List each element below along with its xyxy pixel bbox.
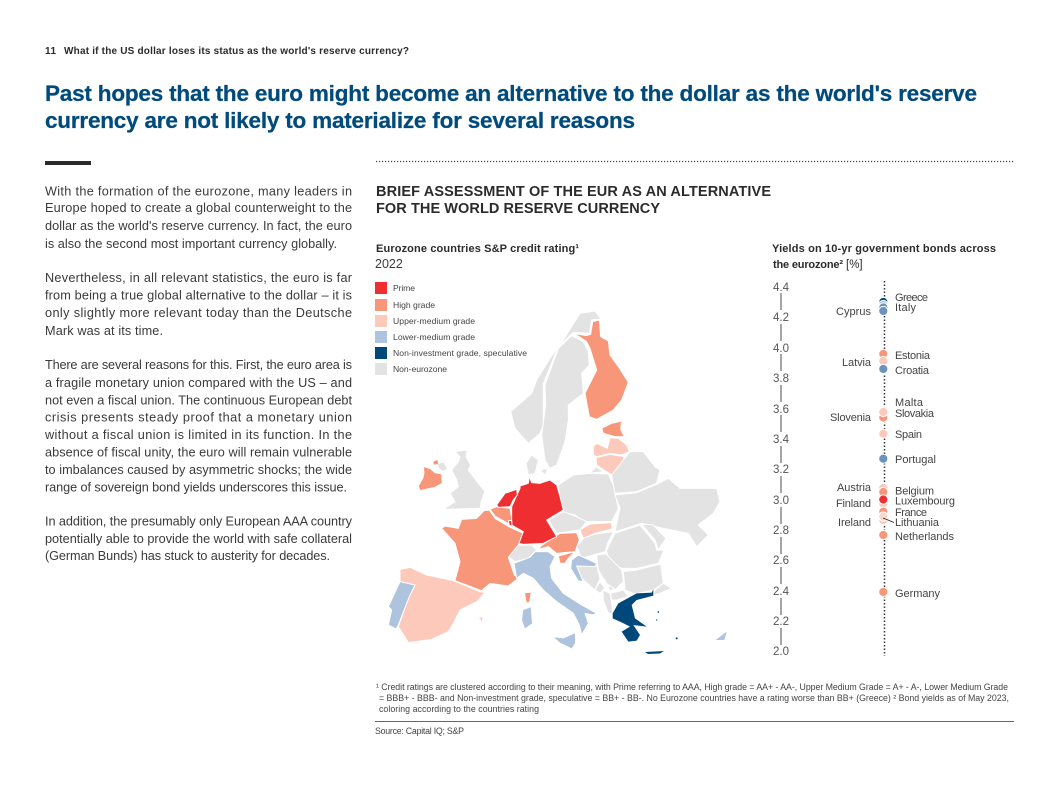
yield country labels right: Luxembourg xyxy=(895,496,955,508)
map of Europe xyxy=(388,311,727,654)
left accent rule xyxy=(45,161,91,165)
footnote rule xyxy=(375,720,1014,722)
body text: Nevertheless, in all relevant statistics, the euro is far xyxy=(45,271,353,285)
body text: only slightly more relevant today than the Deutsche xyxy=(45,306,352,320)
body text: Mark was at its time. xyxy=(45,324,163,338)
yield country labels right: Malta xyxy=(895,397,924,409)
map legend: Lower-medium grade xyxy=(393,332,475,342)
map legend xyxy=(375,282,527,375)
body text: without a fiscal union is limited in its function. In the xyxy=(44,428,352,442)
body text: (German Bunds) has stuck to austerity for decades. xyxy=(45,549,330,563)
yield country labels right xyxy=(895,292,955,600)
eastern Europe xyxy=(540,452,727,648)
dotted yield line xyxy=(884,281,886,656)
yield country labels left: Slovenia xyxy=(830,412,872,424)
body text: potentially able to provide the world with safe collateral xyxy=(45,532,352,546)
yield axis: 2.6 xyxy=(773,555,789,567)
yield country labels right: Lithuania xyxy=(895,517,940,529)
yield country labels left: Finland xyxy=(836,498,871,510)
yield chart heading: Yields on 10-yr government bonds across xyxy=(772,243,996,255)
body text: not even a fiscal union. The continuous European debt xyxy=(45,394,352,408)
yield country labels right: Estonia xyxy=(895,350,931,362)
body text: is also the second most important currency globally. xyxy=(45,237,337,251)
yield axis: 2.0 xyxy=(773,646,789,658)
page header: 11 xyxy=(45,46,56,57)
yield country labels right: Slovakia xyxy=(895,408,935,420)
map heading xyxy=(375,243,579,271)
yield axis: 3.6 xyxy=(773,404,789,416)
map legend: Non-eurozone xyxy=(393,364,447,374)
title xyxy=(45,81,977,133)
title: Past hopes that the euro might become an alternative to the dollar as the world's reserve xyxy=(45,81,977,106)
yield axis: 3.8 xyxy=(773,373,789,385)
yield country labels right: Spain xyxy=(895,429,922,441)
footnote: = BBB+ - BBB- and Non-investment grade, speculative = BB+ - BB-. No Eurozone countries have a rating worse than BB+ (Greece) ² Bond yields as of May 2023, xyxy=(379,693,1009,703)
yield country labels left: Austria xyxy=(837,482,872,494)
footnote: ¹ Credit ratings are clustered according to their meaning, with Prime referring to AAA, High grade = AA+ - AA-, Upper Medium Grade = A+ - A-, Lower Medium Grade xyxy=(376,682,1008,692)
body text: from being a true global alternative to the dollar – it is xyxy=(45,288,352,302)
Lithuania leader line xyxy=(883,518,894,522)
yield axis: 4.0 xyxy=(773,343,789,355)
yield country labels right: Croatia xyxy=(895,365,930,377)
body text xyxy=(44,184,353,563)
yield country labels left xyxy=(830,306,872,529)
body text: There are several reasons for this. First, the euro area is xyxy=(45,358,352,372)
yield dots xyxy=(879,297,888,597)
yield axis: 4.4 xyxy=(773,282,790,294)
yield axis: 3.0 xyxy=(773,495,789,507)
yield country labels right: Belgium xyxy=(895,486,934,498)
northern Europe xyxy=(511,311,629,476)
body text: a fragile monetary union compared with the US – and xyxy=(45,376,352,390)
panel heading: BRIEF ASSESSMENT OF THE EUR AS AN ALTERNATIVE xyxy=(376,184,771,200)
body text: In addition, the presumably only European AAA country xyxy=(45,514,353,528)
yield chart heading: [%] xyxy=(846,259,863,271)
yield country labels right: Greece xyxy=(895,292,928,304)
yield chart heading xyxy=(772,243,996,271)
yield axis: 2.4 xyxy=(773,586,790,598)
footnote xyxy=(376,682,1009,714)
yield axis: 3.2 xyxy=(773,464,789,476)
body text: range of sovereign bond yields underscores this issue. xyxy=(45,480,347,494)
page header: What if the US dollar loses its status as the world's reserve currency? xyxy=(64,46,409,57)
source: Source: Capital IQ; S&P xyxy=(375,726,464,736)
yield country labels left: Latvia xyxy=(842,357,872,369)
yield country labels left: Cyprus xyxy=(836,306,872,318)
yield country labels right: Germany xyxy=(895,588,940,600)
yield axis: 3.4 xyxy=(773,434,790,446)
yield axis: 4.2 xyxy=(773,312,789,324)
map heading: Eurozone countries S&P credit rating¹ xyxy=(376,243,579,255)
title: currency are not likely to materialize for several reasons xyxy=(45,108,635,133)
body text: crisis presents steady proof that a monetary union xyxy=(45,410,352,424)
dotted rule xyxy=(376,160,1014,162)
map heading: 2022 xyxy=(375,257,403,271)
body text: to imbalances caused by asymmetric shocks; the wide xyxy=(45,463,352,477)
Crete xyxy=(645,651,664,654)
body text: Europe hoped to create a global counterweight to the xyxy=(45,201,352,215)
yield country labels right: Portugal xyxy=(895,454,936,466)
panel heading: FOR THE WORLD RESERVE CURRENCY xyxy=(376,201,660,217)
map legend: High grade xyxy=(393,300,435,310)
body text: dollar as the world's reserve currency. In fact, the euro xyxy=(45,219,352,233)
yield axis xyxy=(773,282,790,658)
yield axis: 2.2 xyxy=(773,616,789,628)
yield country labels left: Ireland xyxy=(838,517,871,529)
western Europe xyxy=(388,450,597,643)
map legend: Non-investment grade, speculative xyxy=(393,348,527,358)
footnote: coloring according to the countries rating xyxy=(379,704,539,714)
yield chart heading: the eurozone² xyxy=(773,259,843,271)
body text: absence of fiscal unity, the euro will remain vulnerable xyxy=(45,446,352,460)
map legend: Prime xyxy=(393,283,415,293)
yield country labels right: Italy xyxy=(895,302,916,314)
map legend: Upper-medium grade xyxy=(393,316,475,326)
panel heading xyxy=(376,184,771,217)
yield axis: 2.8 xyxy=(773,525,789,537)
body text: With the formation of the eurozone, many leaders in xyxy=(45,184,352,198)
yield country labels right: Netherlands xyxy=(895,531,954,543)
yield country labels right: France xyxy=(895,507,927,519)
